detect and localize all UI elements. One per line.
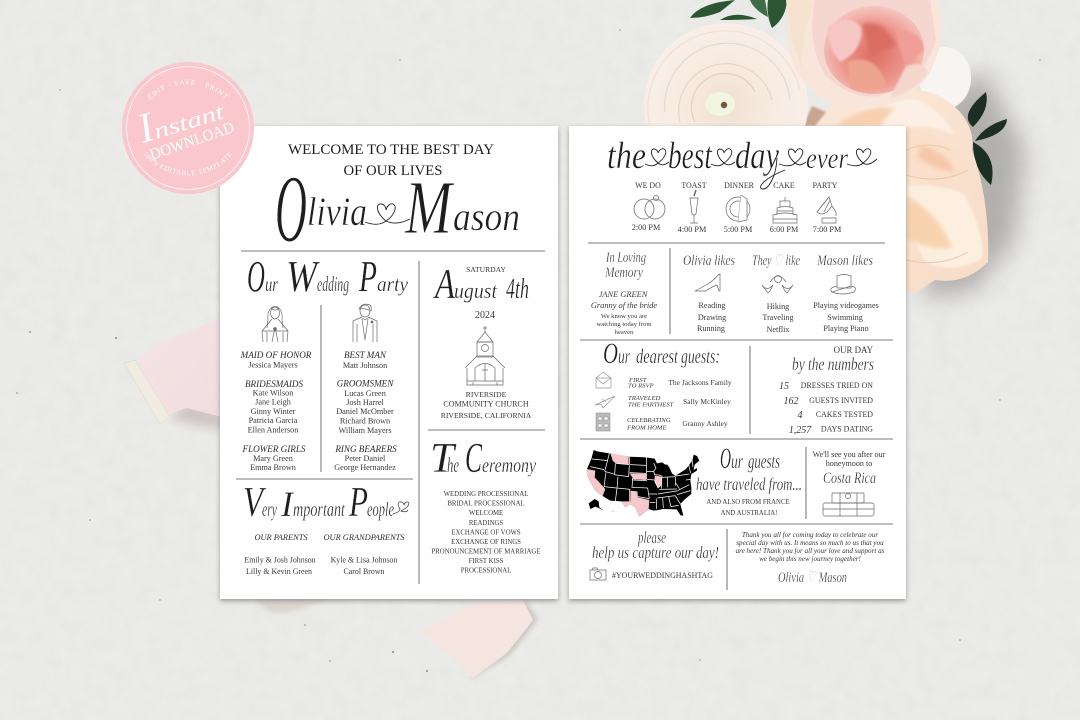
heading: our guests have traveled from: guests xyxy=(748,451,780,473)
block: hashtag xyxy=(590,528,719,580)
memorial block: JANE GREEN xyxy=(599,290,648,299)
icon: house xyxy=(596,413,610,431)
title: couple names script: M xyxy=(404,166,455,250)
list: likes: Playing videogames xyxy=(813,301,879,310)
list: likes: Swimming xyxy=(827,313,863,322)
timeline labels: TOAST xyxy=(681,181,707,190)
list: groom side: Richard Brown xyxy=(340,416,390,426)
heading: the ceremony: he xyxy=(447,453,459,477)
venue address: COMMUNITY CHURCH xyxy=(443,400,529,408)
list: bride side: Ellen Anderson xyxy=(248,426,298,434)
icon: rings xyxy=(634,196,665,219)
heading: our wedding party: arty xyxy=(377,272,409,296)
block: our day by the numbers: 1,257 xyxy=(789,425,812,436)
list: groom side: George Hernandez xyxy=(334,463,396,472)
small white flower xyxy=(919,47,971,109)
list: ceremony order: BRIDAL PROCESSIONAL xyxy=(447,500,525,508)
title: couple names script: livia xyxy=(307,189,367,234)
list: ceremony order: READINGS xyxy=(469,520,503,527)
timeline times: 6:00 PM xyxy=(770,225,799,234)
badge: instant download stamp: EDIT · SAVE · PRINT xyxy=(147,80,228,100)
family names: OUR PARENTS xyxy=(254,533,308,542)
list: likes: Hiking xyxy=(767,302,789,311)
badge: instant download stamp: 100% EDITABLE TEMPLATE xyxy=(144,152,232,176)
leaves xyxy=(690,0,1007,185)
list: groom side: BEST MAN xyxy=(344,350,387,360)
family names: OUR GRANDPARENTS xyxy=(323,533,405,542)
block: our day by the numbers: DRESSES TRIED ON xyxy=(801,381,873,390)
list: groom side: William Mayers xyxy=(338,426,392,435)
memorial block xyxy=(591,250,657,336)
list: groom side: Matt Johnson xyxy=(343,361,387,370)
title: couple names script xyxy=(275,155,520,262)
list: ceremony order: WELCOME xyxy=(469,510,503,517)
block: our day by the numbers: 4 xyxy=(798,410,802,421)
block: our day by the numbers xyxy=(779,345,874,436)
block: honeymoon: honeymoon to xyxy=(826,459,872,468)
date block xyxy=(433,262,529,321)
list: groom side: Lucas Green xyxy=(344,389,386,398)
chart: US map of guest origins xyxy=(587,450,699,516)
list: groom side: Peter Daniel xyxy=(345,454,386,463)
list: ceremony order xyxy=(431,491,541,574)
heading: very important people: ery xyxy=(262,499,277,521)
badge: instant download stamp: nstant xyxy=(151,98,228,144)
list: likes: Netflix xyxy=(767,325,789,334)
list: likes: Playing Piano xyxy=(823,324,869,333)
list: bride side: Jane Leigh xyxy=(255,398,291,406)
block: our day by the numbers: by the numbers xyxy=(792,354,874,374)
list: likes: Drawing xyxy=(698,313,726,322)
list: ceremony order: PROCESSIONAL xyxy=(461,568,511,574)
heading: our wedding party: W xyxy=(286,252,320,301)
heading: our guests have traveled from: AND AUSTRALIA! xyxy=(721,510,777,517)
heading: our dearest guests: guests: xyxy=(681,346,720,368)
title: couple names script: ason xyxy=(453,194,520,239)
icon: envelope xyxy=(596,372,611,388)
badge: instant download stamp: DOWNLOAD xyxy=(148,119,237,164)
heading: very important people: eople xyxy=(367,499,394,521)
heading: very important people: P xyxy=(348,480,368,526)
timeline times xyxy=(632,223,842,234)
icon: bride xyxy=(262,306,288,342)
list: ceremony order: EXCHANGE OF VOWS xyxy=(451,530,521,536)
list: bride side: Mary Green xyxy=(253,454,293,463)
headings: likes xyxy=(683,253,873,269)
timeline labels: CAKE xyxy=(773,181,795,190)
card: left program page xyxy=(220,126,558,599)
timeline labels: WE DO xyxy=(635,181,661,190)
timeline times: 7:00 PM xyxy=(813,225,842,234)
block: our day by the numbers: OUR DAY xyxy=(834,345,874,355)
venue address: RIVERSIDE, CALIFORNIA xyxy=(441,411,532,420)
block: honeymoon: We'll see you after our xyxy=(813,450,886,459)
list: likes: Running xyxy=(697,324,725,333)
list: groom side: GROOMSMEN xyxy=(337,378,394,388)
list: groom side: Daniel McOmber xyxy=(336,407,394,416)
peach rose xyxy=(803,89,988,293)
timeline times: 4:00 PM xyxy=(678,225,707,234)
heading: our guests have traveled from: AND ALSO FROM FRANCE xyxy=(706,499,790,506)
list: bride side: BRIDESMAIDS xyxy=(245,379,303,389)
list: ceremony order: PRONOUNCEMENT OF MARRIAGE xyxy=(431,548,541,556)
block: thank you note: Olivia ♡ Mason xyxy=(778,570,847,586)
date block: ugust xyxy=(454,278,498,303)
ribbon: bottom tails xyxy=(255,600,538,680)
list: bride side: MAID OF HONOR xyxy=(240,350,312,360)
title: the best day ever: ever xyxy=(806,142,848,175)
list: bride side: Kate Wilson xyxy=(253,388,293,398)
icon: champagne flute xyxy=(690,190,698,223)
block: our day by the numbers: GUESTS INVITED xyxy=(809,396,873,405)
state borders xyxy=(590,453,693,509)
ribbon: pink spool left xyxy=(124,318,225,430)
block: hashtag: help us capture our day! xyxy=(592,543,719,562)
family names: Carol Brown xyxy=(344,567,385,576)
list: bride side xyxy=(240,350,312,472)
heading: very important people: V xyxy=(243,480,266,526)
heading: our dearest guests: O xyxy=(603,337,618,370)
icon: airplane xyxy=(595,396,615,408)
heading: our wedding party: O xyxy=(247,252,265,301)
block: our day by the numbers: CAKES TESTED xyxy=(816,410,873,419)
list: likes: Reading xyxy=(699,301,725,310)
block: hashtag: please xyxy=(637,528,666,547)
badge: instant download stamp: I xyxy=(132,104,161,153)
alaska xyxy=(589,499,604,511)
memorial block: Memory xyxy=(604,265,643,281)
icon: gramophone xyxy=(817,197,836,223)
date block: 4th xyxy=(506,274,529,305)
memorial block: In Loving xyxy=(605,250,646,266)
headings: likes: They ♡ like xyxy=(752,253,800,269)
ranunculus cream xyxy=(644,23,808,187)
date block: SATURDAY xyxy=(466,265,506,274)
pink highlighted states xyxy=(587,453,662,516)
flower shadow xyxy=(925,70,1025,300)
guest awards: TRAVELED xyxy=(628,395,661,402)
family names: Lilly & Kevin Green xyxy=(246,567,312,576)
icon: doves with heart xyxy=(762,276,793,293)
heading: the ceremony: T xyxy=(430,436,457,482)
block: thank you note: Thank you all for coming today to celebrate our xyxy=(742,531,878,539)
guest awards: Granny Ashley xyxy=(682,419,728,428)
list: ceremony order: EXCHANGE OF RINGS xyxy=(451,539,521,546)
heading: our guests have traveled from xyxy=(696,442,802,517)
venue address xyxy=(441,390,532,420)
heading: very important people: mportant xyxy=(293,499,345,521)
block: our day by the numbers: DAYS DATING xyxy=(821,424,873,434)
icon: camera xyxy=(590,568,606,580)
guest awards: The Jacksons Family xyxy=(668,378,732,387)
guest awards: FROM HOME xyxy=(626,424,667,432)
heading: our dearest guests: ur xyxy=(618,346,630,368)
heading: our guests have traveled from: ur xyxy=(731,451,743,473)
list: likes: Traveling xyxy=(762,313,794,322)
block: honeymoon xyxy=(813,450,886,487)
venue address: RIVERSIDE xyxy=(466,390,507,399)
list: bride side: Emma Brown xyxy=(250,463,296,472)
icon: plate and cutlery xyxy=(726,195,750,222)
title: welcome heading xyxy=(288,142,494,179)
heading: very important people: I xyxy=(280,484,295,524)
divider lines xyxy=(236,251,545,584)
guest awards: TO RSVP xyxy=(628,382,654,390)
heading: our wedding party: edding xyxy=(317,272,349,296)
heading: very important people xyxy=(243,480,409,526)
heading: our wedding party: ur xyxy=(265,272,279,296)
icon: church xyxy=(465,326,505,385)
icon: suitcases xyxy=(823,493,874,516)
headings: likes: Mason likes xyxy=(816,253,873,269)
timeline times: 5:00 PM xyxy=(724,225,753,234)
timeline times: 2:00 PM xyxy=(632,223,661,232)
list: likes xyxy=(697,301,879,334)
divider lines xyxy=(580,243,893,590)
icon: wedding cake xyxy=(773,197,797,223)
headings: likes: Olivia likes xyxy=(683,253,735,269)
date block: A xyxy=(433,262,455,308)
card: right program page xyxy=(569,126,906,599)
icon: groom xyxy=(353,304,377,342)
block: thank you note xyxy=(736,531,885,586)
block: our day by the numbers: 15 xyxy=(779,381,789,392)
peony pink xyxy=(786,0,942,110)
list: bride side: Patricia Garcia xyxy=(249,416,298,425)
guest awards: CELEBRATING xyxy=(627,417,671,424)
block: thank you note: are here! Thank you for all your love and support as xyxy=(736,547,885,555)
timeline labels xyxy=(635,181,838,190)
title: the best day ever: the xyxy=(607,135,646,177)
title: the best day ever: day xyxy=(735,135,779,177)
list: bride side: FLOWER GIRLS xyxy=(242,444,306,454)
flowers: bouquet top right xyxy=(644,0,1025,300)
list: bride side: Jessica Mayers xyxy=(248,360,298,370)
guest awards xyxy=(626,377,732,432)
memorial block: watching today from xyxy=(597,321,652,328)
icon: top hat xyxy=(831,274,855,294)
memorial block: Granny of the bride xyxy=(591,301,657,310)
list: ceremony order: FIRST KISS xyxy=(469,558,504,565)
heading: our dearest guests: dearest xyxy=(636,346,678,368)
list: bride side: Ginny Winter xyxy=(251,407,296,416)
timeline labels: DINNER xyxy=(724,181,755,190)
heading: our wedding party: P xyxy=(358,252,377,301)
list: ceremony order: WEDDING PROCESSIONAL xyxy=(444,491,528,498)
guest awards: FIRST xyxy=(628,377,648,384)
list: groom side: RING BEARERS xyxy=(334,444,397,454)
block: thank you note: we begin this new journey together! xyxy=(759,555,862,563)
map silhouette xyxy=(587,450,699,516)
block: honeymoon: Costa Rica xyxy=(823,470,876,487)
heading: the ceremony: C xyxy=(465,436,483,482)
family names xyxy=(244,533,405,576)
heading: our guests have traveled from: O xyxy=(720,442,731,475)
memorial block: We know you are xyxy=(601,313,647,320)
block: thank you note: special day with us. It means so much to us that you xyxy=(736,539,884,547)
block: hashtag: #YOURWEDDINGHASHTAG xyxy=(612,571,713,580)
list: groom side: Josh Harrel xyxy=(346,398,384,407)
icon: high heel xyxy=(695,274,720,291)
title: welcome heading: WELCOME TO THE BEST DAY xyxy=(288,142,494,158)
badge: instant download stamp xyxy=(122,62,254,194)
heading: our guests have traveled from: have traveled from... xyxy=(696,474,802,494)
guest awards: THE FARTHEST xyxy=(628,402,675,408)
memorial block: heaven xyxy=(615,329,634,336)
title: couple names script: O xyxy=(275,155,307,262)
family names: Emily & Josh Johnson xyxy=(244,556,316,564)
date block: 2024 xyxy=(475,310,495,321)
family names: Kyle & Lisa Johnson xyxy=(331,556,397,564)
timeline labels: PARTY xyxy=(813,181,838,190)
title: the best day ever xyxy=(607,135,877,189)
guest awards: Sally McKinley xyxy=(683,397,731,406)
title: the best day ever: best xyxy=(668,135,713,177)
list: groom side xyxy=(334,350,397,472)
block: our day by the numbers: 162 xyxy=(784,396,798,407)
heading: the ceremony: eremony xyxy=(482,455,536,477)
title: welcome heading: OF OUR LIVES xyxy=(344,163,442,179)
